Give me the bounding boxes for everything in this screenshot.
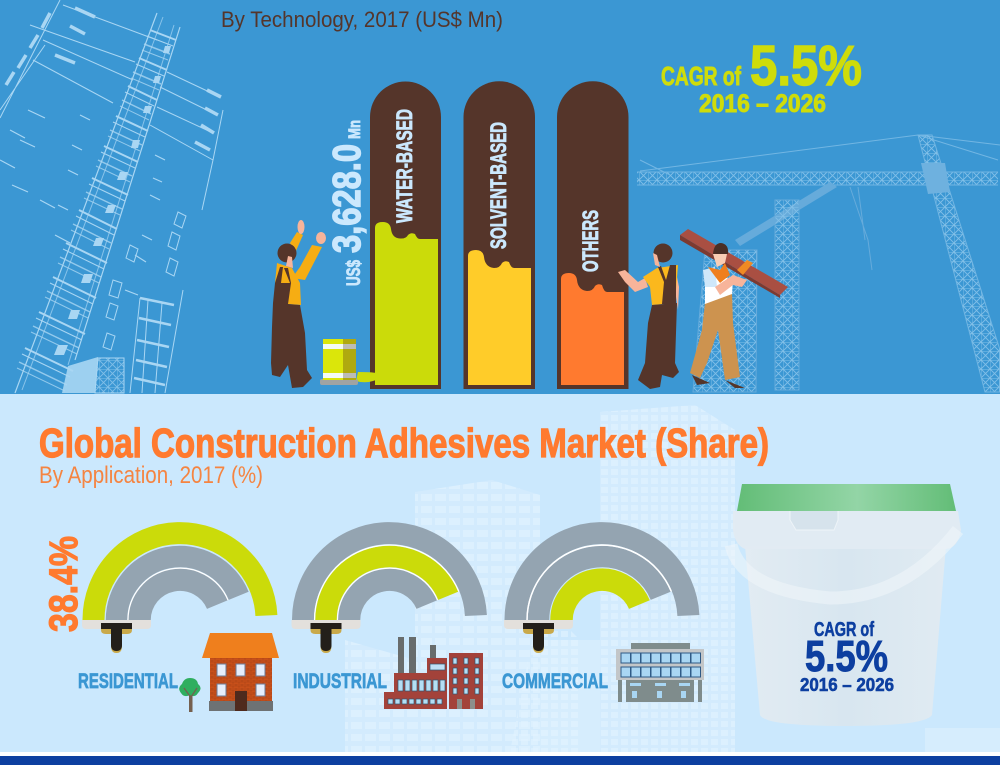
subtitle: by application: By Application, 2017 (%) (39, 462, 263, 489)
worker: touching bar (618, 244, 679, 389)
bar: solvent-based (464, 81, 535, 389)
footer band (0, 752, 1000, 765)
CAGR callout: bucket: CAGR of (814, 619, 874, 641)
background illustration: cranes (637, 135, 1000, 392)
bar: solvent-based: SOLVENT-BASED (486, 122, 511, 249)
top section background (0, 0, 1000, 394)
heading: market share: Global Construction Adhesives Market (Share) (39, 420, 769, 466)
gauge: industrial (292, 533, 476, 653)
lower section background (0, 394, 1000, 752)
value label: US$ 3,628.0 Mn: 3,628.0 (326, 144, 369, 253)
label: residential: RESIDENTIAL (78, 670, 178, 693)
background illustration: high-rise blueprint (0, 0, 223, 393)
bar: water-based: WATER-BASED (392, 109, 417, 223)
worker: carrying plank (680, 229, 788, 388)
bar: others: OTHERS (578, 210, 603, 272)
worker: raising hands (271, 220, 326, 388)
CAGR callout: bucket: 5.5% (805, 632, 888, 681)
CAGR callout: bucket: 2016 – 2026 (800, 675, 894, 695)
icon: adhesive bucket (731, 484, 961, 726)
gauge: commercial (504, 533, 688, 653)
value label: US$ 3,628.0 Mn: US$ (344, 260, 365, 286)
background illustration: low block (62, 357, 124, 393)
CAGR callout: top: 5.5% (750, 34, 862, 98)
bar: water-based (370, 82, 441, 389)
subtitle: by technology: By Technology, 2017 (US$ Mn) (221, 7, 503, 32)
icon: commercial building (616, 643, 704, 702)
CAGR callout: bucket (800, 619, 894, 695)
icon: factory (384, 637, 483, 709)
CAGR callout: top (661, 34, 862, 118)
CAGR callout: top: CAGR of (661, 61, 741, 91)
CAGR callout: top: 2016 – 2026 (699, 90, 826, 118)
value label: US$ 3,628.0 Mn: Mn (345, 120, 364, 139)
bar: others (557, 81, 628, 389)
background illustration: city skyline (345, 405, 1000, 752)
value label: 38.4%: 38.4% (42, 536, 86, 632)
icon: house (202, 633, 279, 711)
icon: tree (179, 678, 200, 712)
icon: paint can (320, 339, 376, 385)
gauge: residential (82, 533, 266, 653)
label: commercial: COMMERCIAL (502, 670, 608, 693)
label: industrial: INDUSTRIAL (293, 670, 387, 693)
